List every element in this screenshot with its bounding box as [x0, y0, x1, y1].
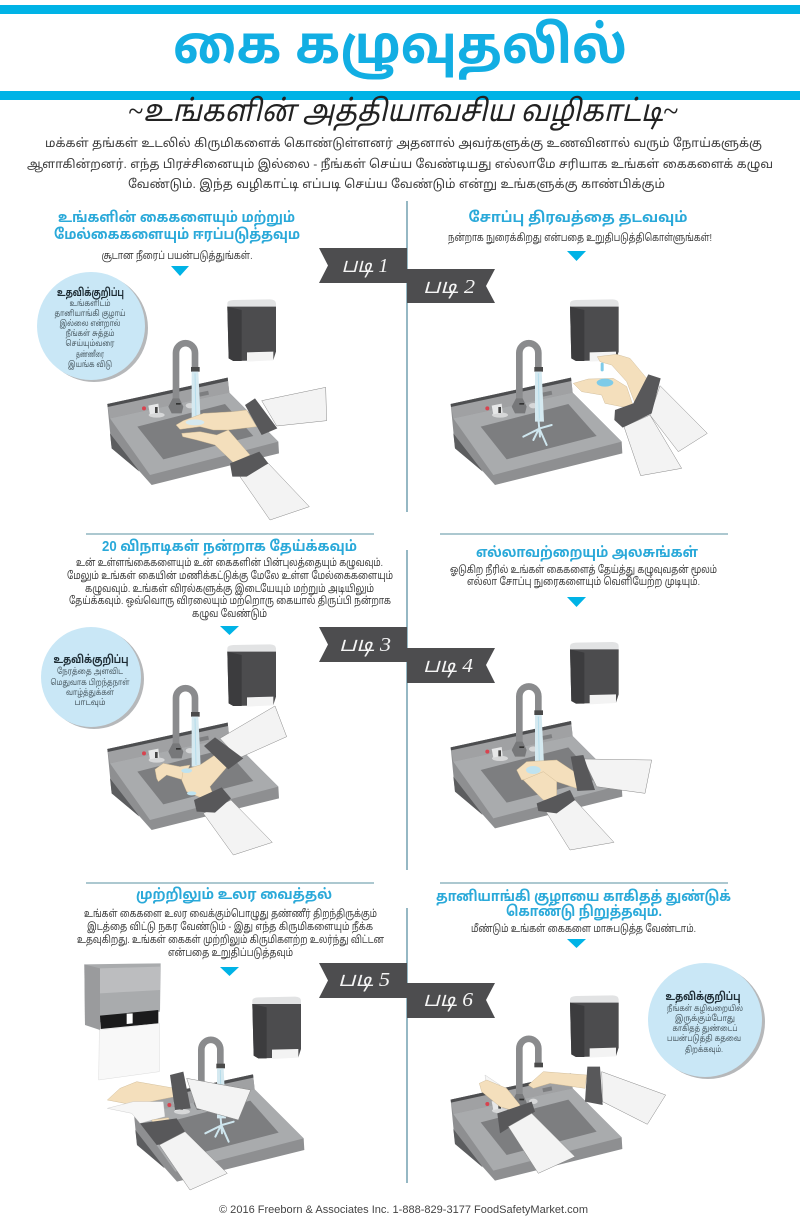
step 4 text: [450, 563, 717, 589]
top bar: [0, 5, 800, 14]
ribbon step 4: படி 4: [423, 655, 473, 678]
step 5 heading: முற்றிலும் உலர வைத்தல்: [136, 886, 332, 904]
step 2 illustration: [451, 299, 707, 485]
step 3 text: தேய்க்கவும். ஒவ்வொரு விரலையும் மற்றொரு கையால் திருப்பி நன்றாக: [69, 594, 391, 608]
ribbon step 5: [319, 963, 407, 998]
step 5 illustration: [84, 963, 304, 1190]
arrow step 4: [567, 597, 586, 607]
tip circle step 6: காகிதத் துண்டைப்: [672, 1023, 738, 1034]
arrow step 6: [567, 939, 586, 948]
tip circle step 6: பயன்படுத்தி கதவை: [667, 1033, 741, 1044]
step 1 text: சூடான நீரைப் பயன்படுத்துங்கள்.: [102, 249, 252, 263]
step 3 text: கழுவ வேண்டும்: [192, 607, 267, 620]
footer: © 2016 Freeborn & Associates Inc. 1-888-829-3177 FoodSafetyMarket.com: [219, 1204, 588, 1216]
step 3 heading: 20 விநாடிகள் நன்றாக தேய்க்கவும்: [102, 538, 357, 556]
step 3 text: மேலும் உங்கள் கையின் மணிக்கட்டுக்கு மேலே உள்ள மேல்கைகளையும்: [67, 569, 393, 582]
tip circle step 3: பாடவும்: [74, 697, 106, 708]
step 5 text: உங்கள் கைகளை உலர வைக்கும்பொழுது தண்ணீர் திறந்திருக்கும்: [84, 907, 377, 921]
ribbon step 5: படி 5: [338, 969, 390, 992]
panel: step 3: [41, 538, 393, 855]
tip circle step 1: நீங்கள் சுத்தம்: [66, 328, 114, 339]
tip circle step 3: வாழ்த்துக்கள்: [66, 687, 114, 698]
paper towel dispenser: [84, 963, 161, 1080]
step 1 heading: [54, 209, 300, 244]
arrow step 3: [220, 626, 239, 635]
intro text: வேண்டும். இந்த வழிகாட்டி எப்படி செய்ய வேண்டும் என்று உங்களுக்கு காண்பிக்கும்: [128, 177, 665, 192]
intro text: [27, 136, 773, 192]
step 5 text: [77, 907, 384, 959]
step 1 heading: மேல்கைகளையும் ஈரப்படுத்தவும: [54, 226, 300, 244]
ribbon step 6: படி 6: [423, 989, 473, 1012]
step 6 text: மீண்டும் உங்கள் கைகளை மாசுபடுத்த வேண்டாம்.: [471, 922, 696, 935]
tip circle step 1: இயங்க விடு: [68, 359, 112, 370]
panel: step 4: [450, 545, 717, 850]
tip circle step 6: [648, 963, 765, 1079]
tip circle step 1: இல்லை என்றால்: [60, 318, 121, 329]
panel: step 1: [37, 209, 327, 520]
panel: step 5: [77, 886, 384, 1190]
step 4 text: ஓடுகிற நீரில் உங்கள் கைகளைத் தேய்த்து கழுவுவதன் மூலம்: [450, 563, 717, 577]
ribbon step 2: படி 2: [423, 276, 475, 299]
step 3 illustration: [107, 644, 287, 855]
ribbon step 2: [407, 269, 495, 303]
arrow step 1: [171, 266, 189, 276]
ribbon step 4: [407, 648, 495, 683]
panel: step 6: [436, 888, 765, 1181]
ribbon step 3: படி 3: [339, 634, 391, 657]
intro text: மக்கள் தங்கள் உடலில் கிருமிகளைக் கொண்டுள்ளனர் அதனால் அவர்களுக்கு உணவினால் வரும் நோய்களுக்கு: [45, 136, 762, 151]
tip circle step 3: மெதுவாக பிறந்தநாள்: [50, 677, 130, 688]
subtitle: ~உங்களின் அத்தியாவசிய வழிகாட்டி~: [128, 95, 678, 131]
ribbon step 1: [319, 248, 407, 283]
tip circle step 1: செய்யும்வரை: [66, 338, 115, 349]
tip circle step 1: தானியாங்கி குழாய்: [54, 308, 126, 319]
step 4 text: எல்லா சோப்பு நுரைகளையும் வெளியேற்ற முடியும்.: [467, 575, 700, 589]
tip circle step 1: தண்ணீரை: [76, 349, 104, 360]
step 5 text: உதவுகிறது. உங்கள் கைகள் முற்றிலும் கிருமிகளற்ற உலர்ந்து விட்டன: [77, 933, 384, 947]
arrow step 5: [220, 967, 239, 976]
ribbon step 3: [319, 627, 407, 662]
title bar: [0, 91, 800, 100]
tip circle step 6: உதவிக்குறிப்பு: [666, 991, 740, 1004]
step 6 heading: [436, 888, 731, 921]
tip circle step 6: நீங்கள் கழிவறையில்: [667, 1003, 743, 1014]
step 6 heading: கொண்டு நிறுத்தவும்.: [506, 903, 662, 921]
step 1 illustration: [107, 299, 327, 520]
tip circle step 3: நேரத்தை அளவிட: [57, 666, 123, 677]
intro text: ஆளாகின்றனர். எந்த பிரச்சினையும் இல்லை - நீங்கள் செய்ய வேண்டியது எல்லாமே சரியாக உங்கள் கைகளைக் கழுவ: [27, 157, 773, 172]
step 2 text: நன்றாக நுரைக்கிறது என்பதை உறுதிபடுத்திகொள்ளுங்கள்!: [448, 231, 712, 245]
step 4 illustration: [451, 642, 652, 850]
step 2 heading: சோப்பு திரவத்தை தடவவும்: [468, 209, 688, 227]
tip circle step 6: இருக்கும்போது: [675, 1013, 735, 1024]
step 3 text: [67, 556, 393, 620]
tip circle step 1: உதவிக்குறிப்பு: [57, 287, 124, 300]
tip circle step 6: திறக்கவும்.: [685, 1044, 723, 1055]
tip circle step 1: [37, 272, 148, 382]
step 4 heading: எல்லாவற்றையும் அலசுங்கள்: [476, 545, 698, 562]
tip circle step 3: உதவிக்குறிப்பு: [54, 654, 128, 667]
section rules: [86, 534, 728, 883]
step 3 text: உன் உள்ளங்கைகளையும் உன் கைகளின் பின்புலத்தையும் கழுவவும்.: [76, 556, 383, 569]
title: கை கழுவுதலில்: [173, 17, 627, 80]
tip circle step 1: உங்களிடம்: [70, 298, 110, 308]
ribbon step 1: படி 1: [342, 255, 388, 278]
step 5 text: என்பதை உறுதிப்படுத்தவும்: [168, 946, 293, 959]
tip circle step 3: [41, 627, 144, 729]
ribbon step 6: [407, 983, 495, 1018]
arrow step 2: [567, 251, 586, 261]
step 5 text: இடத்தை விட்டு நகர வேண்டும் - இது எந்த கிருமிகளையும் நீக்க: [87, 920, 373, 934]
step 6 illustration: [451, 995, 666, 1181]
step 6 heading: தானியாங்கி குழாயை காகிதத் துண்டுக்: [436, 888, 731, 906]
panel: step 2: [448, 209, 712, 485]
step 1 heading: உங்களின் கைகளையும் மற்றும்: [58, 209, 295, 227]
center divider: [406, 201, 408, 1183]
step 3 text: கழுவவும். உங்கள் விரல்களுக்கு இடையேயும் மற்றும் அடியிலும்: [85, 582, 374, 596]
